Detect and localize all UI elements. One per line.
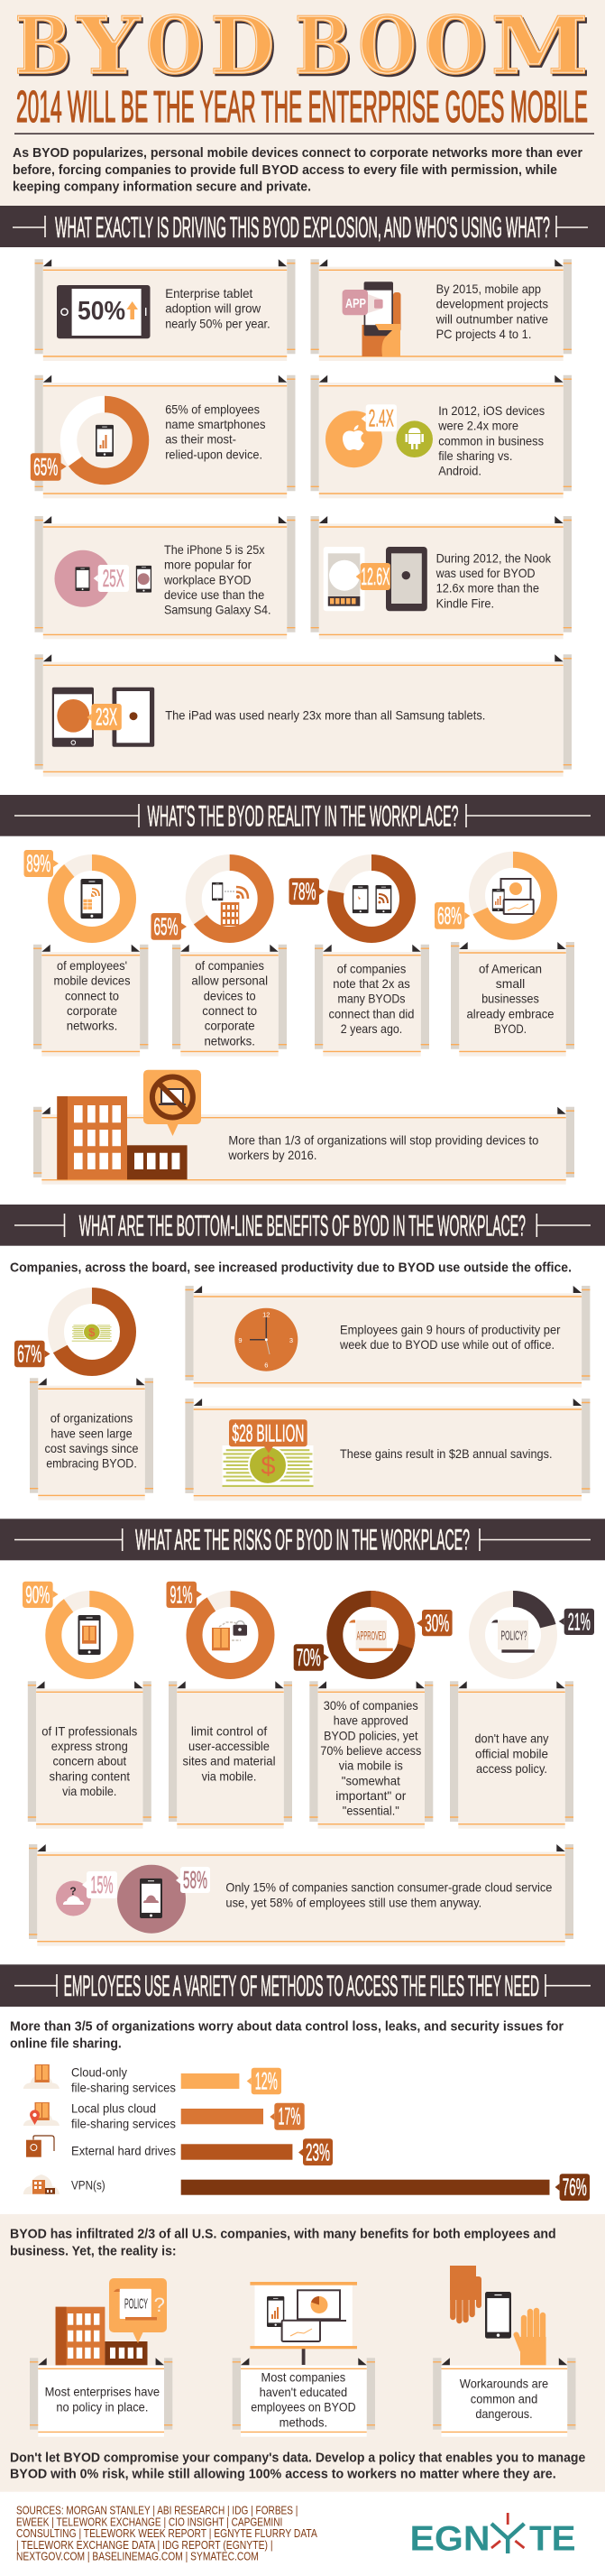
- text: were 2.4x more: [437, 419, 518, 433]
- callout: 78%: 78%: [292, 878, 316, 905]
- text: 65% of employees: [165, 402, 260, 416]
- stat: 65% companies allow: [151, 863, 287, 1057]
- text: "somewhat: [342, 1773, 400, 1787]
- icon: Kindle Fire: [386, 547, 427, 611]
- text: In 2012, iOS devices: [438, 403, 545, 418]
- icon: clock: 3: [289, 1336, 293, 1344]
- text: call to action: BYOD with 0% risk, while still allowing 100% access to workers no matter where they are.: [10, 2468, 556, 2482]
- callout: 89%: [23, 850, 59, 877]
- icon: tablet 50% up: [57, 285, 150, 338]
- text: [227, 1132, 539, 1162]
- callout: 89%: 89%: [26, 850, 50, 877]
- callout: 58%: 58%: [183, 1866, 207, 1893]
- title: D: [210, 0, 275, 92]
- intro text: As BYOD popularizes, personal mobile devices connect to corporate networks more than ever: [13, 146, 582, 161]
- section banner: benefits: [0, 1205, 605, 1246]
- title: O: [358, 0, 417, 92]
- text: infiltrated: BYOD has infiltrated 2/3 of all U.S. companies, with many benefits for both employees and: [10, 2228, 556, 2242]
- card: not educated: [233, 2358, 375, 2437]
- icon: Samsung tablet: [112, 688, 154, 747]
- row: local plus cloud 17%: [23, 2101, 305, 2130]
- sources: CONSULTING | TELEWORK WEEK REPORT | EGNYTE FLURRY DATA: [16, 2527, 317, 2540]
- text: [467, 961, 555, 1036]
- callout: no devices sign: [143, 1070, 201, 1136]
- callout: 21%: [559, 1608, 594, 1635]
- callout: 67%: 67%: [17, 1341, 41, 1368]
- text: development projects: [436, 297, 548, 311]
- callout: 68%: 68%: [437, 902, 462, 929]
- text: workers by 2016.: [227, 1148, 316, 1162]
- title: O: [146, 0, 204, 92]
- text: call to action: [10, 2451, 585, 2482]
- icon: Nook: [324, 547, 364, 611]
- subheading: productivity: Companies, across the board, see increased productivity due to BYOD use outside the office.: [10, 1260, 572, 1275]
- text: BYOD.: [494, 1021, 527, 1036]
- logo: Egnyte: EGN: [409, 2520, 490, 2559]
- text: via mobile.: [62, 1784, 116, 1798]
- card: Nook vs Kindle Fire: [310, 516, 572, 639]
- text: [191, 958, 268, 1048]
- sources: [16, 2505, 317, 2563]
- text: Employees gain 9 hours of productivity per: [340, 1322, 561, 1336]
- chart: donut 65%: [69, 404, 141, 476]
- card: workarounds: [433, 2358, 575, 2437]
- icon: office buildings: [57, 1096, 188, 1179]
- text: [435, 550, 552, 610]
- stat: 89% employees' devices: [23, 850, 148, 1057]
- callout: 68%: [435, 902, 470, 929]
- text: call to action: Don't let BYOD compromise your company's data. Develop a policy that enables you to manage: [10, 2451, 585, 2465]
- text: More than 1/3 of organizations will stop providing devices to: [228, 1132, 539, 1147]
- card: [451, 942, 574, 1057]
- text: of employees': [57, 958, 127, 973]
- text: of American: [479, 961, 542, 975]
- text: [435, 282, 548, 341]
- row: VPN 76%: VPN(s): [71, 2178, 105, 2193]
- text: [45, 1411, 139, 1471]
- card: Nook vs Kindle Fire: 12.6X: [361, 563, 390, 590]
- text: file sharing vs.: [438, 448, 512, 463]
- callout: 90%: 90%: [25, 1581, 50, 1608]
- row: cloud-only 12%: 12%: [255, 2068, 278, 2095]
- text: will outnumber native: [435, 311, 548, 326]
- text: already embrace: [467, 1006, 555, 1020]
- chart: donut 21%: POLICY?: [501, 1628, 527, 1643]
- card: [28, 1681, 151, 1829]
- text: have approved: [334, 1713, 408, 1728]
- chart: donut 68%: [477, 860, 549, 932]
- text: Kindle Fire.: [436, 596, 494, 610]
- icon: hands and phone: [450, 2266, 546, 2365]
- text: many BYODs: [337, 992, 406, 1006]
- icon: clock: 6: [264, 1361, 268, 1370]
- icon: hand holding phone with app: [343, 282, 400, 356]
- text: The iPhone 5 is 25x: [164, 542, 265, 557]
- chart: donut 78%: [335, 863, 408, 935]
- text: common and: [471, 2391, 537, 2405]
- stat: 91% limit control: [166, 1581, 292, 1829]
- chart: donut 89%: [56, 863, 128, 935]
- row: local plus cloud 17%: Local plus cloud: [71, 2101, 156, 2116]
- callout: 23X: 23X: [96, 704, 117, 731]
- stat: 21% no policy: [450, 1599, 594, 1829]
- chart: donut 30/70: APPROVED: [357, 1628, 386, 1642]
- card: smartphones 65%: [31, 375, 296, 498]
- card: [172, 945, 287, 1057]
- text: businesses: [481, 992, 539, 1006]
- text: networks.: [204, 1033, 255, 1048]
- text: Most enterprises have: [45, 2385, 160, 2399]
- card: [33, 945, 148, 1057]
- text: sharing content: [50, 1768, 130, 1783]
- card: tablet adoption: [34, 259, 296, 361]
- text: cost savings since: [45, 1441, 139, 1455]
- card: [169, 1681, 292, 1829]
- text: via mobile.: [202, 1768, 256, 1783]
- title: B: [14, 0, 71, 92]
- row: external hard drives 23%: [26, 2136, 333, 2165]
- text: of IT professionals: [41, 1723, 137, 1738]
- text: Enterprise tablet: [165, 286, 252, 300]
- section banner: reality: [0, 795, 605, 836]
- section banner: risks: [0, 1519, 605, 1560]
- chart: donut 30/70: [335, 1599, 407, 1671]
- row: cloud-only 12%: Cloud-only: [71, 2065, 127, 2080]
- card: annual savings: [185, 1399, 590, 1500]
- text: [41, 1723, 137, 1798]
- row: local plus cloud 17%: 17%: [278, 2103, 301, 2130]
- icon: Galaxy phone: [136, 566, 151, 593]
- stat: 30% approved, 70% believe: [294, 1599, 453, 1829]
- row: cloud-only 12%: file-sharing services: [71, 2080, 176, 2094]
- icon: buildings with policy callout: POLICY: [124, 2296, 148, 2312]
- panel: reality summary: [0, 2214, 605, 2492]
- text: [225, 1880, 553, 1909]
- icon: presentation board: [250, 2282, 357, 2365]
- text: 12.6x more than the: [436, 581, 539, 596]
- card: stop providing devices: [33, 1070, 574, 1185]
- logo: Egnyte: [409, 2513, 576, 2559]
- card: iPad vs Samsung tablets: [34, 654, 572, 777]
- card: consumer-grade cloud: [29, 1844, 573, 1946]
- text: Most companies: [261, 2369, 345, 2384]
- text: employees on BYOD: [251, 2400, 356, 2414]
- icon: tablet 50% up: 50%: [78, 297, 125, 326]
- text: infiltrated: [10, 2228, 556, 2258]
- callout: $28 billion: $28 BILLION: [232, 1420, 304, 1447]
- text: express strong: [51, 1739, 128, 1753]
- callout: 30%: 30%: [425, 1610, 449, 1637]
- callout: 2.4X: [362, 404, 397, 431]
- section banner: methods: [0, 1964, 605, 2007]
- text: use, yet 58% of employees still use them anyway.: [225, 1895, 481, 1909]
- callout: 65%: [151, 913, 187, 940]
- text: via mobile is: [339, 1759, 403, 1773]
- text: connect than did: [328, 1006, 415, 1020]
- icon: iPhone in pink circle: [54, 550, 112, 607]
- text: important" or: [335, 1788, 407, 1803]
- text: [45, 2385, 160, 2414]
- text: small: [496, 976, 525, 991]
- sources: NEXTGOV.COM | BASELINEMAG.COM | SYMATEC.COM: [16, 2551, 259, 2563]
- text: [320, 1698, 421, 1818]
- header panel: [0, 0, 605, 206]
- card: [30, 1378, 153, 1500]
- text: nearly 50% per year.: [165, 316, 270, 330]
- text: 70% believe access: [320, 1743, 421, 1758]
- text: PC projects 4 to 1.: [436, 327, 531, 341]
- text: [474, 1731, 548, 1776]
- callout: 25X: 25X: [103, 565, 124, 592]
- text: devices to: [204, 988, 256, 1002]
- text: "essential.": [343, 1804, 399, 1818]
- text: no policy in place.: [56, 2399, 148, 2414]
- text: limit control of: [191, 1723, 267, 1738]
- title: M: [490, 0, 589, 92]
- text: of organizations: [50, 1411, 133, 1426]
- text: mobile devices: [54, 974, 130, 988]
- text: BYOD policies, yet: [324, 1728, 418, 1742]
- callout: 2.4X: 2.4X: [369, 404, 394, 431]
- chart: donut 90%: [53, 1599, 125, 1671]
- text: week due to BYOD use while out of office.: [339, 1337, 555, 1352]
- stat: 78% companies 2x: [289, 863, 429, 1057]
- text: [460, 2377, 548, 2421]
- callout: 91%: [166, 1581, 202, 1608]
- text: methods.: [280, 2414, 327, 2429]
- card: iOS vs Android: [310, 375, 572, 498]
- text: infiltrated: business. Yet, the reality is:: [10, 2244, 177, 2258]
- text: Android.: [438, 464, 481, 478]
- text: have seen large: [50, 1426, 133, 1440]
- text: more popular for: [164, 558, 252, 572]
- icon: clock: 9: [238, 1336, 243, 1344]
- row: VPN 76%: [23, 2174, 590, 2201]
- card: 9 hours of productivity: [185, 1286, 590, 1388]
- sources: | TELEWORK EXCHANGE DATA | IDG REPORT (EGNYTE) |: [16, 2539, 273, 2552]
- text: common in business: [438, 433, 544, 448]
- chart: donut 67%: [56, 1296, 128, 1368]
- logo: Egnyte: TE: [529, 2520, 576, 2559]
- text: 2 years ago.: [341, 1021, 402, 1036]
- text: dangerous.: [475, 2406, 533, 2421]
- sources: SOURCES: MORGAN STANLEY | ABI RESEARCH | IDG | FORBES |: [16, 2505, 298, 2517]
- text: [328, 961, 415, 1036]
- text: user-accessible: [188, 1739, 270, 1753]
- sources: EWEEK | TELEWORK EXCHANGE | CIO INSIGHT | CAPGEMINI: [16, 2516, 282, 2528]
- text: sites and material: [182, 1754, 276, 1768]
- text: During 2012, the Nook: [436, 550, 552, 565]
- text: connect to: [202, 1003, 257, 1018]
- icon: phone in circle: [117, 1865, 186, 1934]
- callout: 90%: [23, 1581, 59, 1608]
- row: cloud-only 12%: [23, 2064, 281, 2095]
- text: networks.: [67, 1019, 117, 1033]
- text: [339, 1322, 561, 1352]
- card: [315, 945, 429, 1057]
- subheading: data control worries: online file sharing.: [10, 2036, 122, 2051]
- text: [165, 286, 270, 330]
- text: allow personal: [191, 974, 268, 988]
- callout: 58%: [176, 1866, 210, 1893]
- icon: cloud question: ?: [69, 1885, 77, 1897]
- text: workplace BYOD: [163, 572, 252, 586]
- stat: 90% IT professionals: [23, 1581, 151, 1829]
- callout: 70%: [294, 1644, 329, 1671]
- text: connect to: [65, 988, 119, 1002]
- text: of companies: [195, 958, 264, 973]
- callout: 15%: [82, 1871, 117, 1898]
- callout: 78%: [289, 878, 325, 905]
- text: Workarounds are: [460, 2377, 548, 2391]
- text: [54, 958, 130, 1033]
- title: O: [425, 0, 486, 92]
- text: By 2015, mobile app: [436, 282, 541, 296]
- intro text: [13, 146, 582, 195]
- icon: cloud question: [56, 1880, 91, 1916]
- subheading: data control worries: [10, 2020, 564, 2051]
- stat: 68% small businesses: [435, 860, 574, 1057]
- icon: hand holding phone with app: APP: [345, 296, 366, 311]
- chart: donut 91%: [195, 1599, 267, 1671]
- text: official mobile: [475, 1746, 548, 1760]
- text: [251, 2369, 356, 2429]
- chart: donut 65%: [194, 863, 266, 935]
- text: [182, 1723, 276, 1783]
- icon: money bill: [222, 1445, 314, 1487]
- card: [450, 1681, 573, 1829]
- card: mobile app development: [310, 259, 572, 361]
- text: Samsung Galaxy S4.: [164, 603, 270, 617]
- callout: 70%: 70%: [297, 1644, 321, 1671]
- text: 30% of companies: [324, 1698, 418, 1713]
- text: embracing BYOD.: [46, 1456, 137, 1471]
- icon: iPad: [52, 688, 94, 747]
- row: local plus cloud 17%: file-sharing services: [71, 2116, 176, 2130]
- bar chart: access methods: [23, 2064, 590, 2201]
- text: was used for BYOD: [435, 566, 536, 580]
- text: don't have any: [474, 1731, 548, 1746]
- callout: 91%: 91%: [170, 1581, 193, 1608]
- icon: android circle: [396, 420, 433, 457]
- subheading: data control worries: More than 3/5 of organizations worry about data control loss, leaks, and security issues for: [10, 2020, 564, 2035]
- callout: $28 billion: [229, 1419, 307, 1453]
- text: concern about: [52, 1754, 126, 1768]
- text: of companies: [337, 961, 406, 975]
- icon: buildings with policy callout: [56, 2278, 167, 2365]
- callout: 12.6X: [356, 563, 390, 590]
- row: external hard drives 23%: 23%: [306, 2138, 330, 2165]
- icon: buildings with policy callout: ?: [154, 2294, 165, 2316]
- chart: donut 21%: [477, 1599, 549, 1671]
- icon: apple circle: [325, 411, 382, 467]
- text: access policy.: [476, 1761, 547, 1776]
- title: Y: [76, 0, 141, 92]
- text: as their most-: [165, 432, 236, 447]
- text: device use than the: [164, 587, 264, 602]
- text: adoption will grow: [165, 301, 261, 316]
- intro text: before, forcing companies to provide full BYOD access to every file with permission, while: [13, 163, 557, 178]
- text: [163, 542, 270, 617]
- text: These gains result in $2B annual savings.: [340, 1446, 552, 1461]
- callout: 15%: 15%: [90, 1871, 114, 1898]
- callout: 65%: 65%: [153, 913, 179, 940]
- text: corporate: [205, 1019, 255, 1033]
- title: [14, 0, 589, 92]
- icon: clock: [234, 1308, 298, 1371]
- card: no policy: [30, 2358, 172, 2437]
- text: relied-upon device.: [165, 447, 262, 461]
- card: iPhone 5 vs Galaxy S4: [34, 516, 296, 639]
- text: The iPad was used nearly 23x more than all Samsung tablets.: [165, 707, 485, 722]
- callout: 67%: [14, 1341, 50, 1368]
- callout: 65%: 65%: [33, 453, 58, 480]
- icon: money bill: $: [261, 1452, 276, 1481]
- title: B: [295, 0, 352, 92]
- intro text: keeping company information secure and private.: [13, 180, 311, 195]
- row: external hard drives 23%: External hard drives: [71, 2143, 176, 2157]
- text: [437, 403, 545, 478]
- chart: donut 67%: $: [88, 1325, 96, 1339]
- text: name smartphones: [165, 417, 265, 431]
- callout: 23X: [87, 704, 122, 731]
- text: Only 15% of companies sanction consumer-grade cloud service: [225, 1880, 553, 1895]
- callout: 65%: [31, 453, 67, 481]
- text: corporate: [67, 1003, 117, 1018]
- text: [165, 402, 265, 461]
- icon: clock: 12: [262, 1310, 270, 1319]
- callout: 30%: [417, 1610, 453, 1637]
- text: note that 2x as: [333, 976, 410, 991]
- text: haven't educated: [260, 2385, 347, 2399]
- callout: 25X: [94, 565, 129, 592]
- stat: 67% cost savings: [14, 1296, 153, 1500]
- card: [309, 1681, 433, 1829]
